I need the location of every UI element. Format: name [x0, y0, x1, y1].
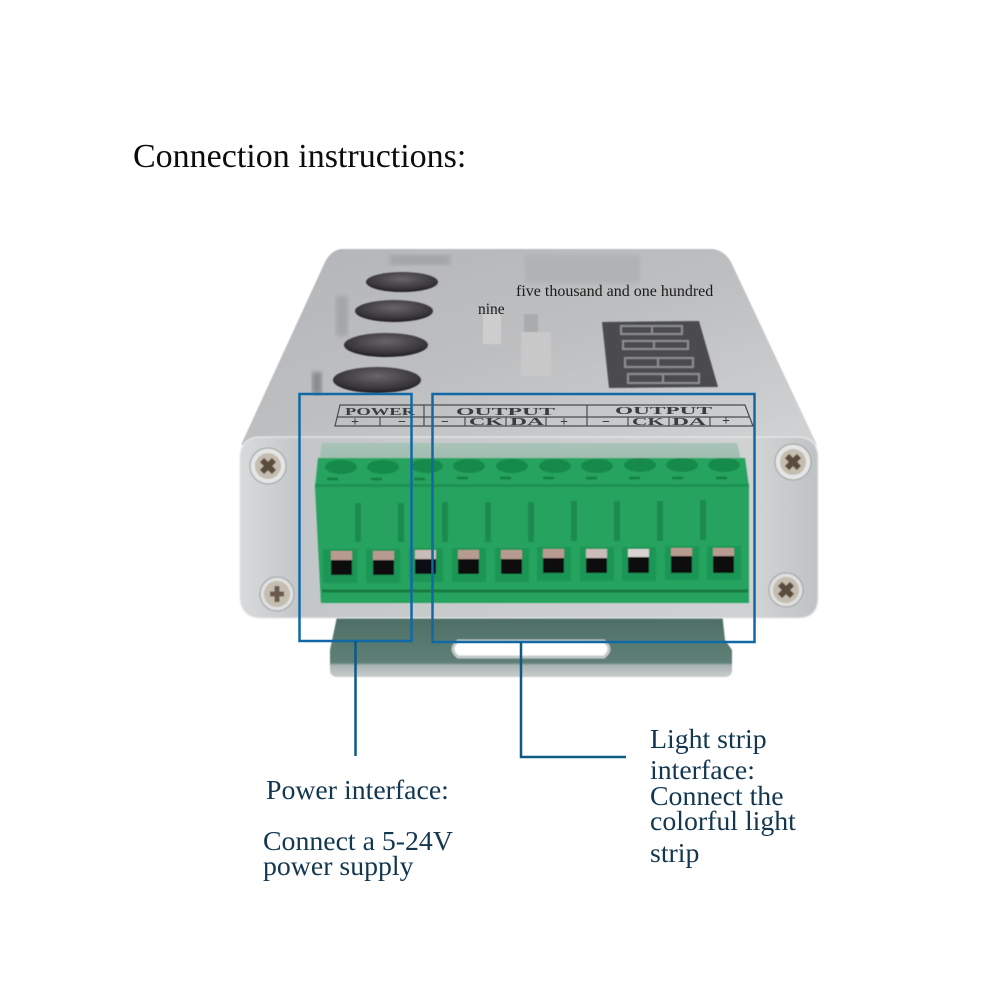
leader line: power — [354, 641, 357, 756]
green terminal block — [315, 443, 749, 603]
overlay label: nine: nine — [478, 301, 505, 318]
label: light strip interface: strip — [650, 838, 699, 869]
screw holes — [325, 458, 740, 474]
marker dashes — [327, 478, 727, 479]
wire entry frames — [323, 546, 741, 583]
label: power interface: Connect a 5-24V — [263, 826, 453, 857]
upper panel slots — [358, 500, 703, 542]
label: light strip interface — [650, 724, 796, 869]
screws — [250, 444, 811, 611]
leader line: light strip — [521, 642, 626, 757]
terminal label table: − — [602, 415, 610, 430]
mounting bracket — [330, 612, 732, 677]
terminal label table: OUTPUT — [456, 406, 556, 418]
terminal label table: CK — [632, 416, 665, 428]
device top plate — [241, 249, 817, 445]
terminal label table — [335, 405, 753, 430]
terminal label table: OUTPUT — [615, 405, 713, 417]
terminal label table: + — [351, 415, 359, 430]
terminal label table: DA — [510, 416, 544, 428]
wire entry windows — [331, 548, 734, 575]
label: light strip interface: colorful light — [650, 806, 796, 837]
buttons — [333, 272, 438, 393]
front plate — [240, 437, 818, 618]
label: power interface: Power interface: — [266, 775, 449, 806]
controller device photo — [240, 249, 818, 677]
terminal label table: DA — [672, 416, 706, 428]
label: power interface: power supply — [263, 851, 414, 882]
label: light strip interface: Connect the — [650, 781, 784, 812]
terminal label table: + — [722, 414, 730, 429]
title: Connection instructions: — [133, 138, 466, 175]
callout box: light strip interface — [432, 394, 754, 642]
callout box: power interface — [300, 394, 412, 641]
terminal label table: CK — [469, 416, 504, 428]
terminal label table: + — [560, 415, 568, 430]
label: light strip interface: interface: — [650, 755, 755, 786]
overlay label: five thousand: five thousand and one hundred — [516, 283, 713, 300]
terminal label table: − — [441, 415, 449, 430]
label: light strip interface: Light strip — [650, 724, 767, 755]
terminal label table: POWER — [345, 406, 417, 418]
LED display — [602, 321, 718, 388]
label: power interface — [263, 775, 453, 882]
terminal label table: − — [398, 415, 406, 430]
